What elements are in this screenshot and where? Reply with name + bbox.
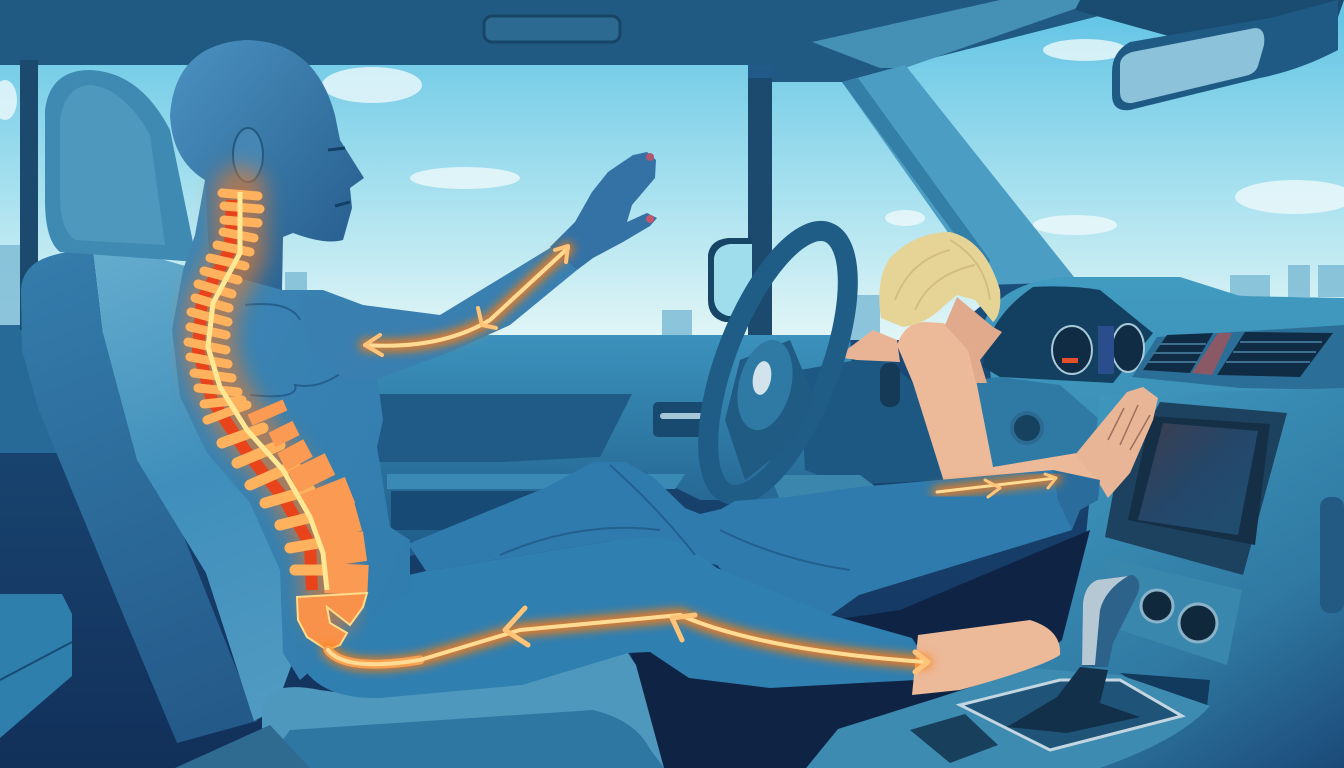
badge — [750, 360, 774, 396]
knobs — [1141, 590, 1217, 642]
rear window — [0, 65, 20, 325]
extended leg — [295, 536, 925, 698]
thumb nail — [646, 215, 654, 223]
side mirror — [708, 238, 752, 322]
seat cushion — [262, 653, 664, 768]
column stalk — [880, 363, 900, 407]
trouser cuff — [1053, 470, 1100, 530]
button row — [910, 714, 998, 763]
grab handle — [484, 16, 620, 42]
hair strands — [895, 240, 990, 310]
gear knob chrome — [1082, 576, 1128, 665]
windshield — [905, 0, 1344, 305]
leg line — [328, 615, 925, 664]
door panel — [330, 335, 860, 560]
rear view mirror — [1112, 0, 1338, 110]
gauges — [1052, 324, 1144, 374]
arm arrowheads — [365, 246, 568, 355]
dash lower section — [975, 377, 1100, 470]
seat base — [175, 725, 310, 768]
wheel hub — [729, 334, 801, 436]
roof mount — [1075, 0, 1344, 42]
controls panel — [1103, 557, 1242, 665]
arm — [300, 245, 577, 380]
left vent — [1143, 333, 1213, 373]
rear pillar — [20, 60, 38, 330]
sciatic tail — [328, 650, 420, 664]
passenger fingers — [1108, 405, 1150, 450]
cabin floor glimpse — [770, 475, 880, 500]
door inset — [372, 394, 632, 462]
dark footwell — [630, 530, 1090, 768]
windows — [0, 0, 1344, 340]
raised leg — [408, 462, 1072, 615]
chest crease — [245, 304, 345, 396]
roof and pillars — [0, 0, 1344, 340]
steering wheel — [679, 214, 877, 512]
ear — [233, 128, 263, 182]
dash top — [985, 277, 1344, 768]
spinal core line — [208, 192, 327, 590]
arm line — [365, 248, 568, 346]
arm glow — [365, 248, 568, 346]
screen bezel — [1105, 402, 1287, 575]
roof — [0, 0, 1130, 82]
shin line — [937, 478, 1056, 492]
dash right panel — [1132, 325, 1344, 390]
nerve line: leg — [328, 608, 928, 672]
seat back bolster — [93, 249, 300, 721]
spine glow — [208, 192, 330, 610]
wheel spokes — [725, 340, 815, 480]
spine — [188, 192, 368, 650]
driver seat — [21, 70, 664, 768]
head — [170, 40, 364, 290]
a-pillar — [842, 65, 1078, 285]
front side window — [772, 82, 1000, 340]
leg glow — [328, 615, 925, 664]
gauge warning lights — [1062, 358, 1078, 363]
rear door trim — [0, 325, 75, 453]
vertebra processes — [188, 193, 325, 570]
gear knob — [1082, 575, 1139, 667]
foot — [912, 620, 1060, 695]
headrest highlight — [60, 85, 165, 245]
passenger face — [945, 297, 1002, 383]
trouser folds — [500, 465, 850, 570]
red spinal backing — [198, 200, 312, 590]
instrument hood — [983, 286, 1153, 383]
driver figure — [170, 40, 1100, 698]
console floor panel — [806, 668, 1210, 768]
leg arrowheads — [505, 608, 928, 672]
shift boot — [1007, 667, 1140, 733]
door trim strip — [387, 474, 685, 489]
steering column — [800, 360, 945, 485]
front passenger figure — [837, 232, 1158, 498]
sacrum — [297, 593, 367, 650]
ignition knob — [1012, 413, 1042, 443]
storage cavity — [1120, 673, 1210, 706]
lumbar vertebra bodies — [250, 405, 368, 580]
headrest — [45, 70, 197, 262]
door handle — [653, 402, 707, 437]
overhead panel — [812, 0, 1100, 68]
passenger back — [837, 330, 900, 362]
console body — [810, 388, 1344, 768]
shin arrowheads — [985, 474, 1056, 497]
hand — [550, 152, 657, 270]
wheel rim — [679, 214, 877, 512]
clouds — [0, 39, 1344, 235]
dashboard — [983, 277, 1344, 768]
rear seat seam — [0, 642, 72, 680]
main side window — [38, 65, 748, 335]
screen — [1138, 423, 1258, 535]
center console — [806, 388, 1344, 768]
seat back outer — [21, 249, 257, 743]
window pillar — [748, 78, 772, 340]
eye and mouth — [328, 148, 350, 206]
rear seat — [0, 594, 72, 738]
a-pillar shade — [842, 78, 990, 275]
screen frame — [1128, 416, 1270, 545]
shin glow — [937, 478, 1056, 492]
passenger arm — [897, 322, 1097, 490]
right vent — [1217, 332, 1333, 377]
lower door pocket — [391, 491, 620, 530]
city skyline — [0, 245, 1344, 340]
shift surround — [960, 680, 1182, 750]
passenger hand — [1075, 387, 1158, 498]
nails — [646, 153, 654, 161]
glovebox edge — [1320, 497, 1344, 613]
torso — [172, 180, 410, 680]
hazard button — [1192, 333, 1232, 375]
nerve line: arm — [365, 246, 568, 355]
nerve line: raised leg — [937, 474, 1056, 497]
blonde hair — [879, 232, 1000, 327]
cushion lower panel — [262, 710, 664, 768]
